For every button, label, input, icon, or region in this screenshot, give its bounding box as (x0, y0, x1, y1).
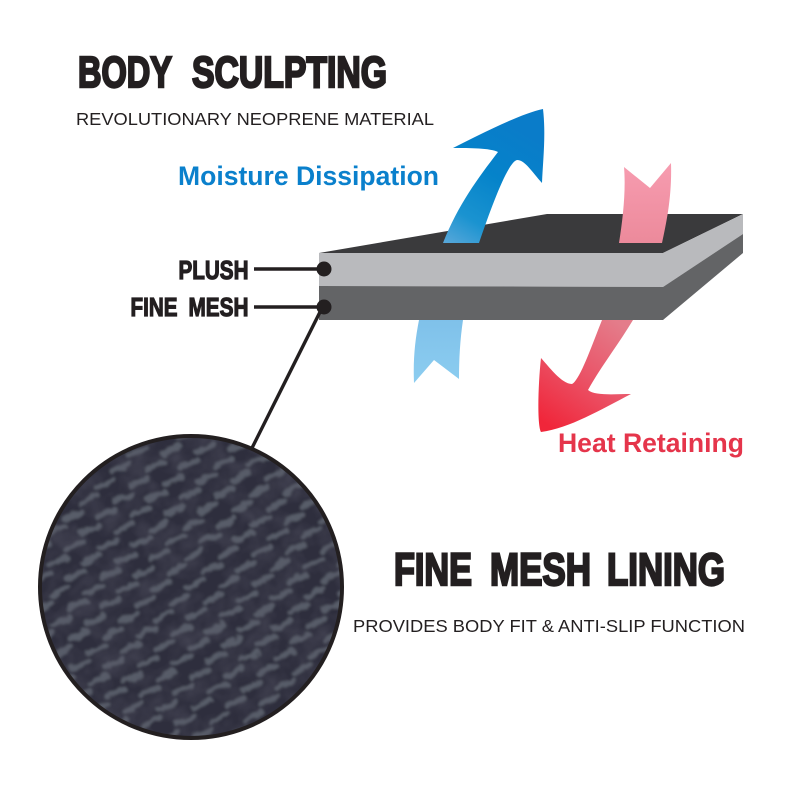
fabric close-up circle (38, 434, 344, 740)
leader: plush (254, 262, 332, 276)
label: moisture dissipation: Moisture Dissipation (178, 161, 439, 191)
label: fine mesh: MESH (188, 292, 248, 322)
label: fine mesh (130, 292, 248, 322)
label: heat retaining: Heat Retaining (558, 428, 744, 458)
heading: fine mesh lining: MESH (490, 544, 591, 595)
arrow: moisture leaving top (443, 109, 544, 243)
arrow: heat retained bottom (538, 320, 633, 432)
heading: fine mesh lining: FINE (394, 544, 472, 595)
label: fine mesh: FINE (130, 292, 178, 322)
title: body sculpting (78, 48, 387, 97)
subtitle: revolutionary neoprene material: REVOLUTIONARY NEOPRENE MATERIAL (76, 109, 434, 129)
material layers slab (319, 214, 743, 320)
leader: fine mesh to circle (252, 300, 332, 448)
arrow: moisture entering bottom (414, 320, 463, 383)
subtitle: provides body fit: PROVIDES BODY FIT & ANTI-SLIP FUNCTION (353, 616, 745, 636)
arrow: heat entering top (619, 163, 671, 243)
title: body sculpting: SCULPTING (192, 48, 387, 97)
heading: fine mesh lining (394, 544, 725, 595)
title: body sculpting: BODY (78, 48, 172, 97)
heading: fine mesh lining: LINING (607, 544, 725, 595)
label: plush: PLUSH (178, 255, 248, 285)
